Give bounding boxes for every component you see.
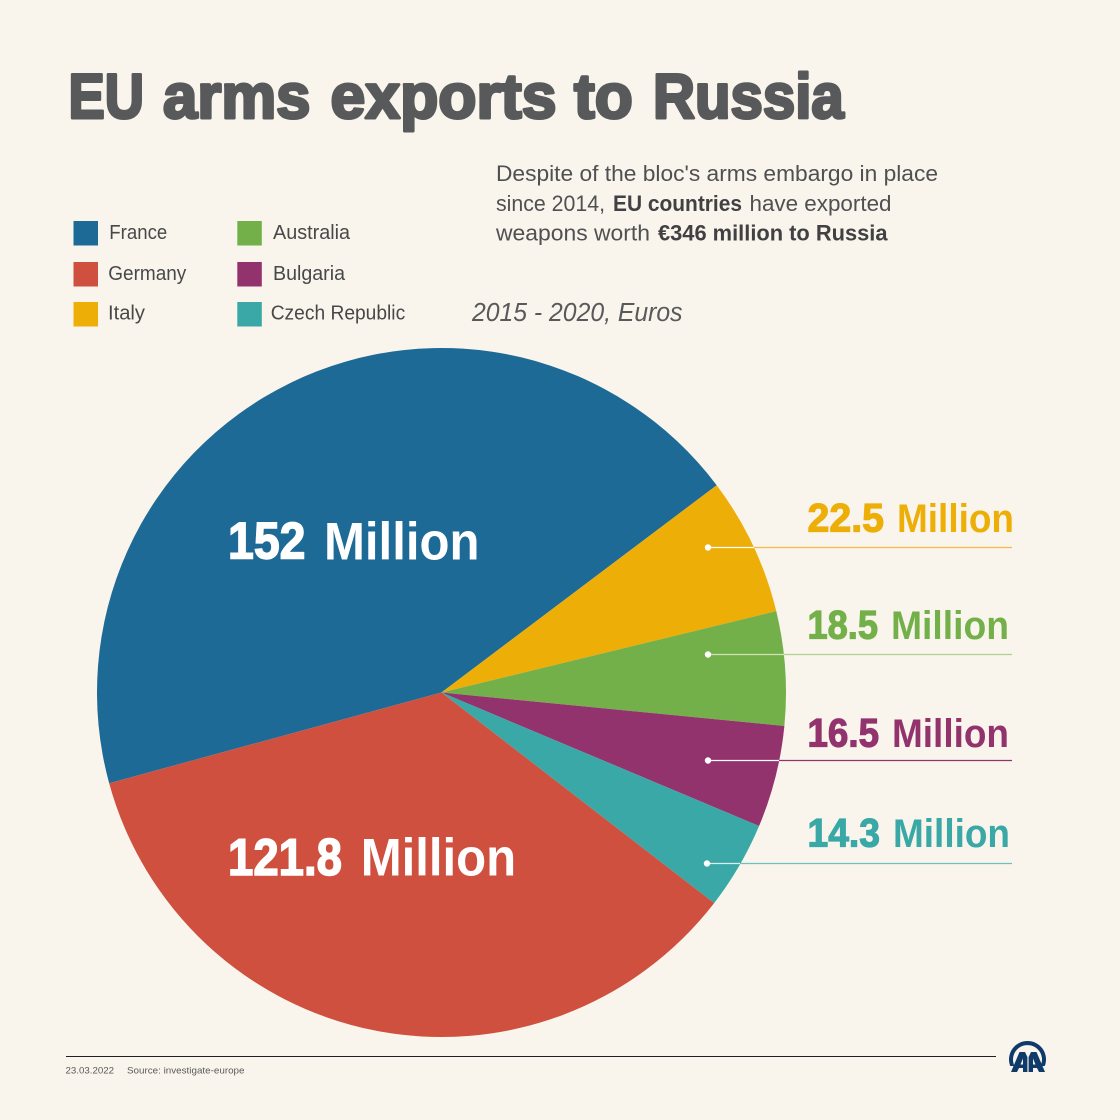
description text: weapons worth: [495, 220, 650, 246]
callout: Bulgaria: 16.5: [808, 711, 879, 755]
footer rule: [66, 1056, 996, 1058]
description text: have exported: [750, 191, 892, 216]
callout: Bulgaria: Million: [892, 712, 1009, 756]
description text: [495, 161, 938, 246]
callout: Australia: 18.5: [808, 604, 878, 648]
callout: Bulgaria: [705, 711, 1012, 764]
legend item: Bulgaria: [237, 262, 346, 286]
callout: Czech Republic: 14.3: [808, 811, 880, 855]
title: arms: [163, 62, 310, 132]
legend item: Czech Republic: [237, 302, 405, 326]
legend item: Italy: Italy: [108, 302, 145, 324]
title: EU: [68, 62, 144, 132]
slice: Germany: [109, 692, 714, 1037]
icon: AA logo: [1009, 1041, 1046, 1072]
legend item: France: France: [109, 222, 167, 244]
title: exports: [330, 62, 556, 132]
label: Germany value: 121.8: [228, 829, 342, 887]
title: [68, 62, 845, 132]
legend item: Czech Republic: Czech Republic: [271, 302, 405, 324]
legend item: Australia: [237, 221, 351, 246]
slice: Australia: [442, 611, 786, 726]
period subtitle: 2015 - 2020, Euros: [471, 299, 683, 327]
legend item: Italy: [74, 302, 145, 326]
label: France value: Million: [324, 512, 480, 571]
slice: Bulgaria: [442, 692, 784, 826]
description text: Despite of the bloc's arms embargo in place: [496, 161, 938, 186]
footer date and source: 23.03.2022: [66, 1065, 114, 1076]
label: France value: [228, 512, 480, 571]
legend item: Australia: Australia: [273, 222, 351, 244]
footer date and source: Source: investigate-europe: [127, 1065, 244, 1076]
callout: Australia: [705, 604, 1012, 658]
callout: Italy: [705, 496, 1014, 551]
callout: Czech Republic: [704, 811, 1012, 867]
legend: [74, 221, 405, 326]
slice: Italy: [442, 485, 776, 692]
description text: €346 million to Russia: [658, 220, 888, 246]
label: France value: 152: [228, 513, 306, 571]
slice: Czech Republic: [442, 692, 759, 903]
legend item: Germany: Germany: [108, 263, 186, 285]
slice: France: [97, 348, 717, 783]
pie chart: [97, 348, 786, 1037]
legend item: Bulgaria: Bulgaria: [273, 263, 346, 285]
legend item: Germany: [74, 262, 186, 286]
label: Germany value: [228, 829, 516, 888]
description text: EU countries: [613, 191, 742, 216]
title: to: [574, 62, 633, 132]
callout: Australia: Million: [891, 604, 1009, 648]
callout: Czech Republic: Million: [893, 812, 1010, 856]
title: Russia: [653, 62, 845, 132]
callout: Italy: 22.5: [808, 496, 884, 540]
description text: since 2014,: [496, 191, 605, 216]
callout: Italy: Million: [897, 497, 1014, 541]
label: Germany value: Million: [361, 829, 516, 888]
footer date and source: [66, 1065, 244, 1076]
legend item: France: [74, 221, 167, 246]
